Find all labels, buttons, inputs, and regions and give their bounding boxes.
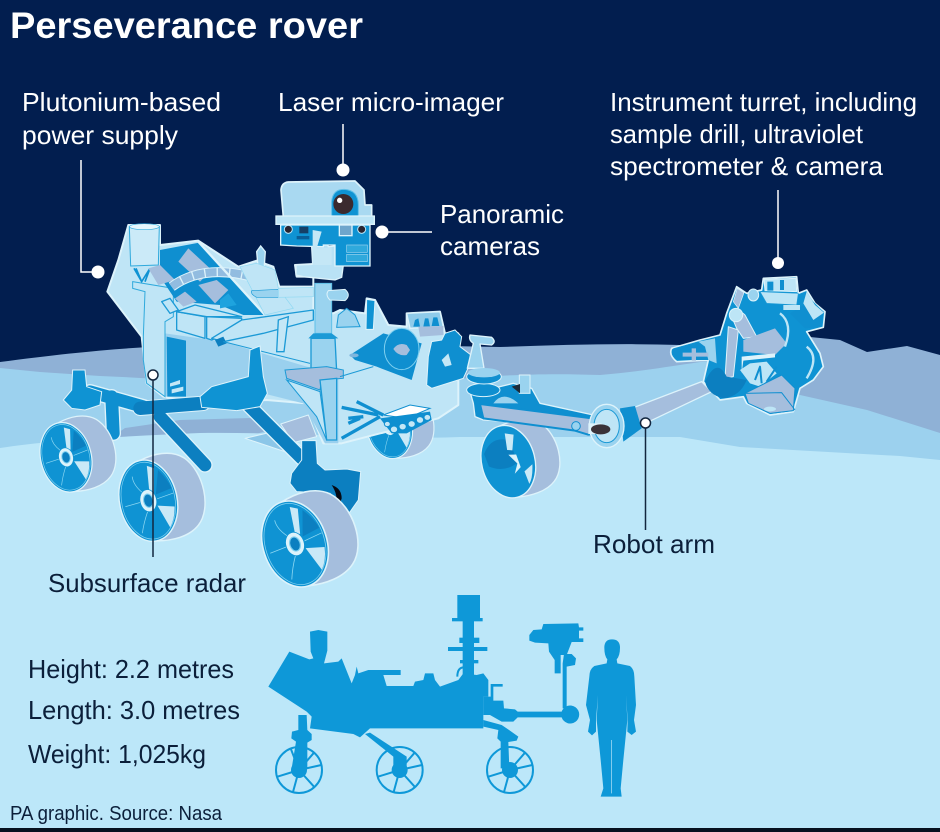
body mid panel: [165, 333, 338, 443]
label: instrument turret: sample drill, ultraviolet: [610, 119, 864, 149]
joint blob: [215, 337, 227, 347]
upper arm: [632, 382, 712, 427]
flap under body: [245, 415, 317, 457]
specifications text: Weight: 1,025kg: [28, 739, 206, 769]
label: robot arm: Robot arm: [593, 529, 715, 559]
label: instrument turret: [610, 87, 917, 269]
bracket behind arm: [427, 330, 473, 388]
mast silhouette: [448, 595, 487, 680]
rover body silhouette outline: [107, 225, 458, 443]
solar deck panel: [148, 242, 265, 315]
black tyre shadow: [332, 485, 342, 505]
rover silhouette body: [268, 630, 488, 737]
far hills: [0, 336, 940, 500]
rover illustration: [32, 181, 473, 598]
middle wheel silhouette: [377, 747, 423, 793]
label: panoramic cameras: Panoramic: [440, 199, 564, 229]
mast: [296, 230, 348, 372]
rear antenna: [240, 246, 313, 315]
human figure: [586, 639, 636, 797]
rear wheel silhouette: [276, 747, 322, 793]
wheel: front left: [250, 480, 369, 598]
power supply canister: [129, 224, 159, 282]
wrist upright: [467, 335, 593, 427]
label: laser micro-imager: Laser micro-imager: [278, 87, 504, 117]
label: panoramic cameras: [376, 199, 564, 261]
shoulder: [588, 404, 642, 448]
foreground ground: [0, 433, 940, 832]
electronics panel: [167, 337, 186, 397]
arm upright and turret silhouette: [529, 623, 583, 708]
sample caching box: [285, 367, 343, 440]
instrument turret: [671, 277, 825, 415]
left column: [133, 282, 173, 397]
label: robot arm: [593, 418, 715, 559]
strap: [277, 317, 288, 352]
title: Perseverance rover: [10, 5, 363, 46]
middle hills: [0, 358, 940, 520]
label: laser micro-imager: [278, 87, 504, 176]
rear wheel behind body: [360, 384, 440, 464]
robot arm and turret: [467, 277, 825, 505]
arm silhouette: [483, 684, 579, 723]
wheel: rear left: [32, 409, 123, 499]
label: power supply: power supply: [22, 120, 178, 150]
suspension silhouette: [291, 715, 518, 770]
scale silhouette: rover and human: [268, 595, 636, 797]
front right wheel: [473, 412, 567, 505]
label: power supply: [22, 87, 221, 278]
box modules: [162, 298, 313, 342]
hill shadow: [108, 418, 275, 440]
source credit: PA graphic. Source: Nasa: [10, 803, 223, 825]
gear near mast: [337, 299, 375, 329]
front cowl with dish: [349, 312, 443, 380]
camera head: laser micro-imager and panoramic cameras: [276, 181, 374, 266]
label: instrument turret: Instrument turret, including: [610, 87, 917, 117]
specifications text: Height: 2.2 metres: [28, 654, 234, 684]
bottom rule: [0, 828, 940, 832]
specifications text: Length: 3.0 metres: [28, 695, 240, 725]
label: power supply: Plutonium-based: [22, 87, 221, 117]
front wheel silhouette: [487, 747, 533, 793]
cables and pipes: [342, 402, 432, 438]
specifications text: [28, 654, 240, 769]
label: instrument turret: spectrometer & camera: [610, 151, 884, 181]
forearm: [480, 404, 605, 435]
wheel: middle left: [111, 446, 212, 549]
label: subsurface radar: [48, 370, 246, 598]
label: panoramic cameras: cameras: [440, 231, 540, 261]
rear rocker suspension: [63, 346, 361, 517]
label: subsurface radar: Subsurface radar: [48, 568, 246, 598]
